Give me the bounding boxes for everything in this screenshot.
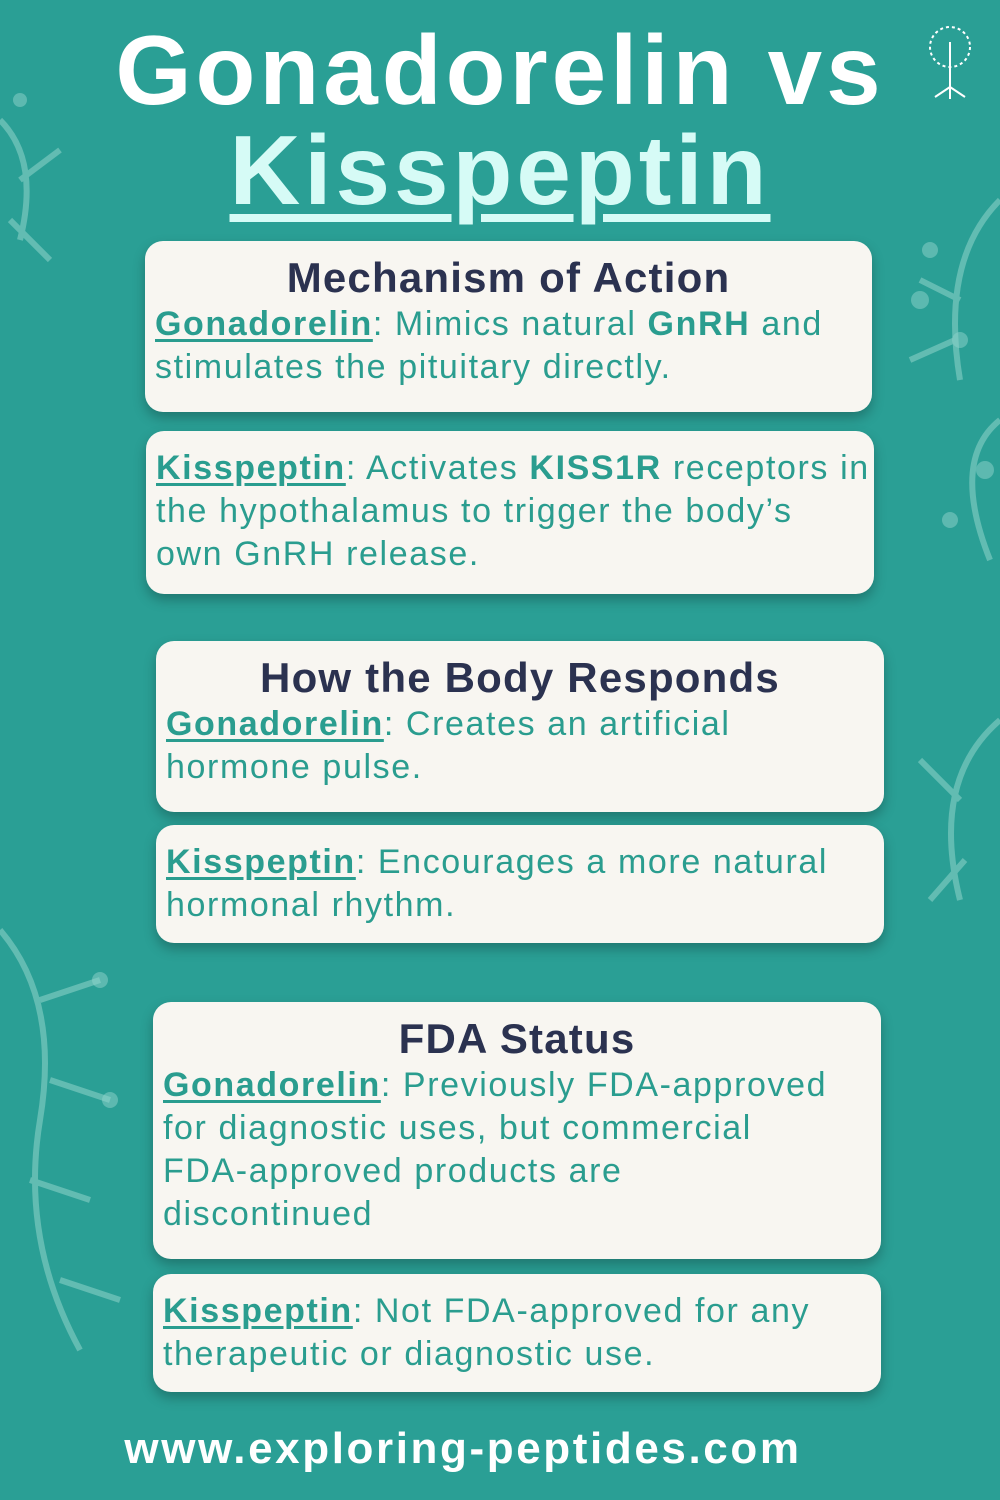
panel: fda gonadorelin (153, 1002, 881, 1259)
text: gonadorelin fda: discontinued (163, 1195, 373, 1233)
panel: fda kisspeptin (153, 1274, 881, 1392)
text: gonadorelin fda (163, 1066, 827, 1233)
text: gonadorelin mechanism: stimulates the pituitary directly. (155, 348, 672, 386)
panel: response gonadorelin (156, 641, 884, 812)
panel: mechanism kisspeptin: own GnRH release. (156, 535, 480, 573)
panel: mechanism kisspeptin (146, 431, 874, 594)
panel: fda kisspeptin: Kisspeptin: Not FDA-approved for any (163, 1292, 810, 1330)
panel: response kisspeptin: Kisspeptin: Encourages a more natural (166, 843, 828, 881)
panel: fda kisspeptin: therapeutic or diagnostic use. (163, 1335, 655, 1373)
text: gonadorelin fda: Gonadorelin: Previously FDA-approved (163, 1066, 827, 1104)
panel: mechanism kisspeptin: Kisspeptin: Activates KISS1R receptors in (156, 449, 870, 487)
panel: response kisspeptin: hormonal rhythm. (166, 886, 456, 924)
text: gonadorelin mechanism (155, 305, 823, 386)
text: gonadorelin fda: FDA-approved products are (163, 1152, 623, 1190)
heading: mechanism: Mechanism of Action (287, 254, 730, 301)
title: Gonadorelin vs (115, 15, 885, 125)
text: gonadorelin response: hormone pulse. (166, 748, 423, 786)
footer url: www.exploring-peptides.com (124, 1424, 802, 1473)
text: gonadorelin fda: for diagnostic uses, but commercial (163, 1109, 752, 1147)
text: gonadorelin response: Gonadorelin: Creates an artificial (166, 705, 731, 743)
icon: tree logo (929, 26, 971, 99)
heading: body responds: How the Body Responds (260, 654, 780, 701)
text: gonadorelin mechanism: Gonadorelin: Mimics natural GnRH and (155, 305, 823, 343)
text: gonadorelin response (166, 705, 731, 786)
panel: response kisspeptin (156, 825, 884, 943)
heading: fda: FDA Status (399, 1015, 635, 1062)
panel: mechanism kisspeptin: the hypothalamus to trigger the body’s (156, 492, 793, 530)
title: Kisspeptin (230, 115, 770, 225)
panel: mechanism gonadorelin (145, 241, 872, 412)
title (115, 15, 885, 225)
